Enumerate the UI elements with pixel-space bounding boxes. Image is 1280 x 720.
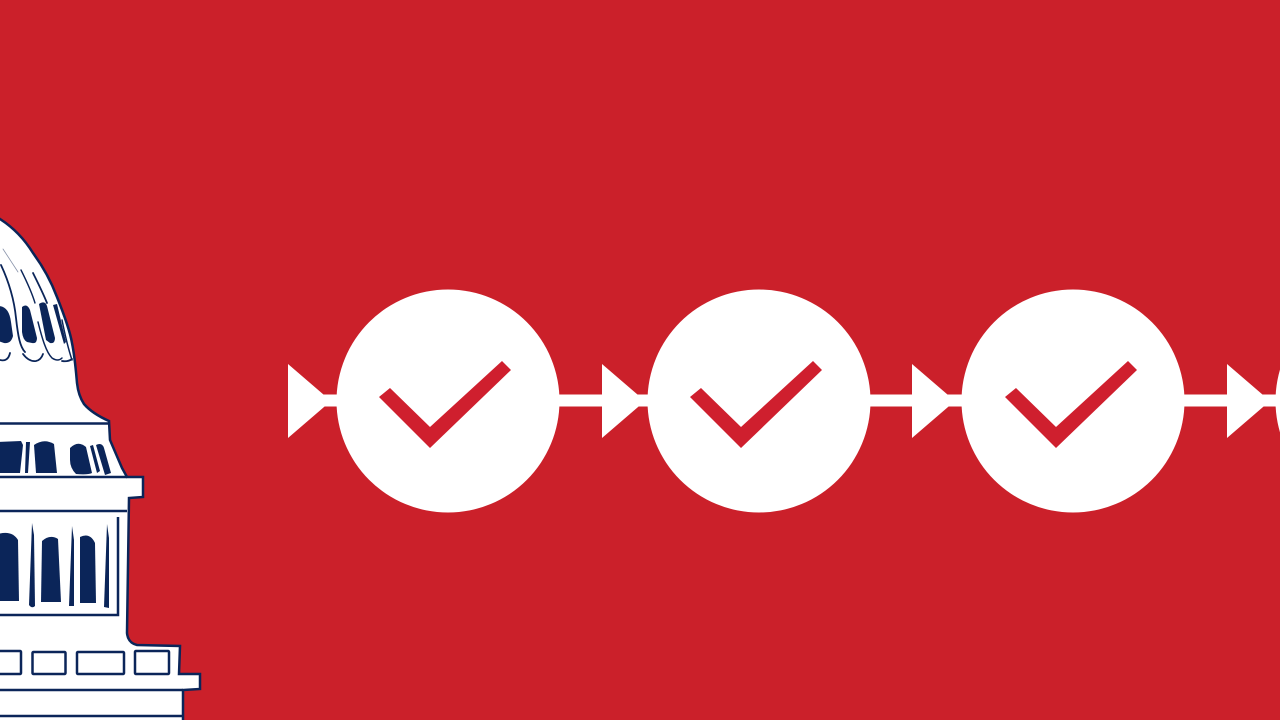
- arrow 1: [288, 364, 331, 438]
- circle 4 (cropped): [1276, 290, 1280, 512]
- arrow 3: [912, 364, 955, 438]
- drum windows: [0, 441, 111, 475]
- check 1: [379, 361, 511, 448]
- building silhouette: [0, 215, 200, 720]
- dome ribs: [0, 249, 72, 361]
- circle 1: [336, 290, 560, 512]
- circle 2: [648, 290, 870, 512]
- connector line: [320, 394, 1280, 406]
- colonnade windows and columns: [0, 523, 109, 608]
- icon: capitol building: [0, 215, 200, 720]
- entablature lines: [0, 477, 183, 716]
- dome windows: [0, 302, 66, 344]
- process chain: check circles and arrows: [288, 290, 1280, 512]
- check 3: [1005, 361, 1137, 448]
- base panels: [0, 651, 169, 674]
- drum band line: [0, 422, 109, 425]
- circle 3: [962, 290, 1184, 512]
- check 2: [690, 361, 822, 448]
- arrow 4: [1227, 364, 1270, 438]
- arrow 2: [602, 364, 645, 438]
